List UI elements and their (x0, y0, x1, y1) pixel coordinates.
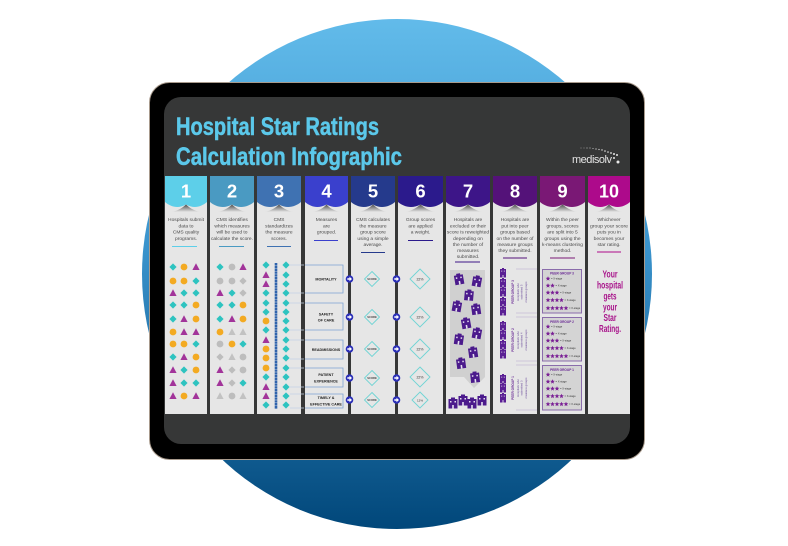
peer group 1 box: PEER GROUP 1 (550, 368, 574, 372)
panel: step 3: scores. (271, 236, 287, 242)
panel: step 2 (210, 176, 254, 414)
panel: step 6: Group scores (406, 217, 436, 223)
group labels: MORTALITY (315, 278, 337, 282)
panel: step 7: score is reweighted (447, 230, 489, 236)
panel: step 1: programs. (175, 236, 197, 242)
score labels: SCORE (367, 315, 377, 319)
panel: step 8: on the number of (497, 236, 534, 242)
peer group descriptions: PEER GROUP 1 (511, 376, 515, 400)
connector lines and group boxes (290, 265, 343, 408)
panel: step 8: 8 (510, 180, 520, 202)
panel: step 5 (351, 176, 395, 414)
peer group descriptions: measure groups (524, 329, 528, 350)
panel: step 1 (165, 176, 207, 414)
group labels: PATIENT (318, 373, 334, 377)
score labels: SCORE (367, 277, 377, 281)
score labels (367, 277, 377, 402)
panel: step 5: using a simple (357, 236, 389, 242)
logo: medisolv (572, 148, 620, 166)
panel: step 7: excluded or their (450, 224, 486, 230)
group labels: SAFETY (319, 312, 334, 316)
peer group 2 box: = X-stage (551, 324, 563, 328)
tablet frame (150, 82, 644, 460)
weight labels (416, 278, 424, 402)
step 1 shapes (169, 263, 200, 399)
hospital icons (448, 273, 486, 408)
panel: step 5: the measure (359, 224, 387, 230)
star rating message: your (603, 302, 617, 314)
panel: step 2: will be used to (216, 230, 248, 236)
dotted peer group connectors (516, 269, 537, 410)
panel: step 5: CMS calculates (356, 217, 391, 223)
peer group 2 box: = X-stage (560, 338, 572, 342)
panel: step 9 (540, 176, 585, 414)
panel: step 5: 5 (368, 180, 378, 202)
panel: step 9: groups using the (544, 236, 581, 242)
panel: step 7: measures (457, 248, 479, 254)
panel: step 4 (290, 176, 348, 414)
peer group descriptions: submitted 4 (520, 332, 524, 347)
panel: step 3: standardizes (265, 224, 293, 230)
peer group 2 box: = X-stage (556, 332, 567, 336)
panel: step 4: grouped. (317, 230, 336, 236)
panel: step 8 (493, 176, 537, 414)
panel: step 2: CMS identifies (216, 217, 248, 223)
panel: step 10 (588, 176, 630, 414)
star rating message: Your (602, 270, 618, 280)
peer group descriptions: PEER GROUP 3 (511, 280, 515, 304)
panel: step 8: Hospitals are (501, 217, 530, 223)
panel: step 2: which measures (214, 224, 250, 230)
step 3 measure column right (282, 261, 290, 409)
star rating message (597, 270, 623, 335)
weight labels: 22% (416, 348, 424, 352)
weight labels: 22% (416, 316, 424, 320)
panel: step 1: Hospitals submit (168, 217, 205, 223)
panel: step 3: 3 (274, 180, 284, 202)
title: Calculation Infographic (176, 143, 402, 171)
star rating message: Star (604, 313, 617, 324)
panel: step 1: 1 (181, 180, 191, 202)
peer group 3 box: PEER GROUP 3 (550, 272, 574, 276)
group labels: EXPERIENCE (314, 380, 338, 384)
peer group 3 box: = X-stage (569, 306, 581, 310)
step 3 measure column left (262, 261, 270, 409)
weight labels: 22% (416, 278, 424, 282)
panel: step 4: are (323, 224, 330, 230)
panel: step 6: 6 (415, 180, 426, 202)
peer group 1 box: = X-stage (564, 394, 576, 398)
panel: step 5: average. (363, 242, 383, 248)
peer group 1 box: = X-stage (569, 402, 581, 406)
group labels: EFFECTIVE CARE (310, 402, 342, 406)
panel: step 10: star rating. (597, 242, 621, 248)
panel: step 8: measure groups (497, 242, 533, 248)
panel: step 3 (257, 176, 301, 414)
panel: step 1: data to (179, 224, 194, 230)
weight diamonds (410, 269, 430, 408)
peer group descriptions: Hospitals who (516, 283, 520, 301)
panel: step 3: the measure (265, 230, 293, 236)
panel: step 3: CMS (274, 217, 285, 223)
peer group 1 box (542, 366, 582, 410)
panel: step 7 (446, 176, 490, 414)
star rating message: gets (604, 292, 617, 302)
peer group 3 box: = X-stage (560, 290, 572, 294)
panel: step 2: calculate the score. (211, 236, 253, 242)
panel: step 10: Whichever (597, 217, 621, 223)
panel: step 9: groups, scores (546, 224, 579, 230)
panel: step 8: they submitted. (498, 248, 532, 254)
peer group descriptions: submitted 5 (520, 284, 524, 299)
peer group hospitals (500, 268, 506, 402)
peer group descriptions: PEER GROUP 2 (511, 328, 515, 352)
background circle (142, 19, 652, 529)
excluded hospitals funnel (450, 270, 485, 388)
panel: step 10: becomes your (594, 236, 625, 242)
score labels: SCORE (367, 376, 377, 380)
panel: step 6 (398, 176, 443, 414)
panel: step 7: Hospitals are (454, 217, 483, 223)
peer group 1 box: = X-stage (560, 386, 572, 390)
peer group 3 box: = X-stage (551, 276, 563, 280)
panel: step 7: the number of (453, 242, 484, 248)
step 2 shapes (216, 263, 247, 399)
peer group 3 box: = X-stage (556, 284, 567, 288)
weight labels: 22% (416, 376, 424, 380)
panel: step 7: 7 (463, 180, 473, 202)
peer group 1 box: = X-stage (551, 372, 563, 376)
peer group 2 box: PEER GROUP 2 (550, 320, 574, 324)
title (176, 113, 402, 171)
panel: step 8: groups based (500, 230, 530, 236)
logo: medisolv: medisolv (572, 154, 612, 166)
panel: step 4: 4 (321, 180, 332, 202)
peer group descriptions: measure groups (524, 377, 528, 398)
group labels: READMISSIONS (312, 348, 341, 352)
panel: step 9: method. (554, 248, 571, 254)
panel: step 9: 9 (557, 180, 568, 202)
group labels (310, 278, 342, 406)
panel: step 7: submitted. (457, 254, 479, 260)
peer group 1 box: = X-stage (556, 380, 567, 384)
panel: step 6: a weight. (411, 230, 430, 236)
panel: step 9: Within the peer (546, 217, 579, 223)
panel: step 9: are split into 5 (547, 230, 578, 236)
peer group 3 box: = X-stage (564, 298, 576, 302)
step 3 blue chain (275, 263, 277, 409)
panel: step 10: 10 (599, 180, 619, 202)
panel: step 2: 2 (227, 180, 237, 202)
panel: step 8: put into peer (501, 224, 529, 230)
peer group 2 box: = X-stage (564, 346, 576, 350)
peer group 2 box: = X-stage (569, 354, 581, 358)
star rating message: Rating. (599, 324, 621, 335)
panel: step 5: group score (360, 230, 386, 236)
panel: step 7: depending on (453, 236, 483, 242)
score labels: SCORE (367, 398, 377, 402)
peer group 2 box (542, 318, 582, 361)
star rating message: hospital (597, 280, 623, 292)
panel: step 4: Measures (316, 217, 338, 223)
tablet screen (164, 97, 630, 444)
panel: step 6: are applied (408, 224, 433, 230)
peer group descriptions: Hospitals who (516, 379, 520, 397)
arrows between score columns (346, 275, 400, 404)
group labels: TIMELY & (318, 396, 335, 400)
panel: step 1: CMS quality (173, 230, 200, 236)
title: Hospital Star Ratings (176, 113, 379, 141)
group labels: OF CARE (318, 318, 335, 322)
peer group 3 box (542, 270, 582, 313)
peer group descriptions: measure groups (524, 281, 528, 302)
panel: step 9: k-means clustering (542, 242, 583, 248)
peer group descriptions (511, 280, 528, 400)
score labels: SCORE (367, 347, 377, 351)
panel: step 10: puts you in (597, 230, 621, 236)
peer group descriptions: Hospitals who (516, 331, 520, 349)
peer group descriptions: submitted 3 (520, 380, 524, 395)
panel: step 10: group your score (590, 224, 628, 230)
score diamonds (364, 272, 380, 408)
weight labels: 12% (417, 398, 423, 402)
